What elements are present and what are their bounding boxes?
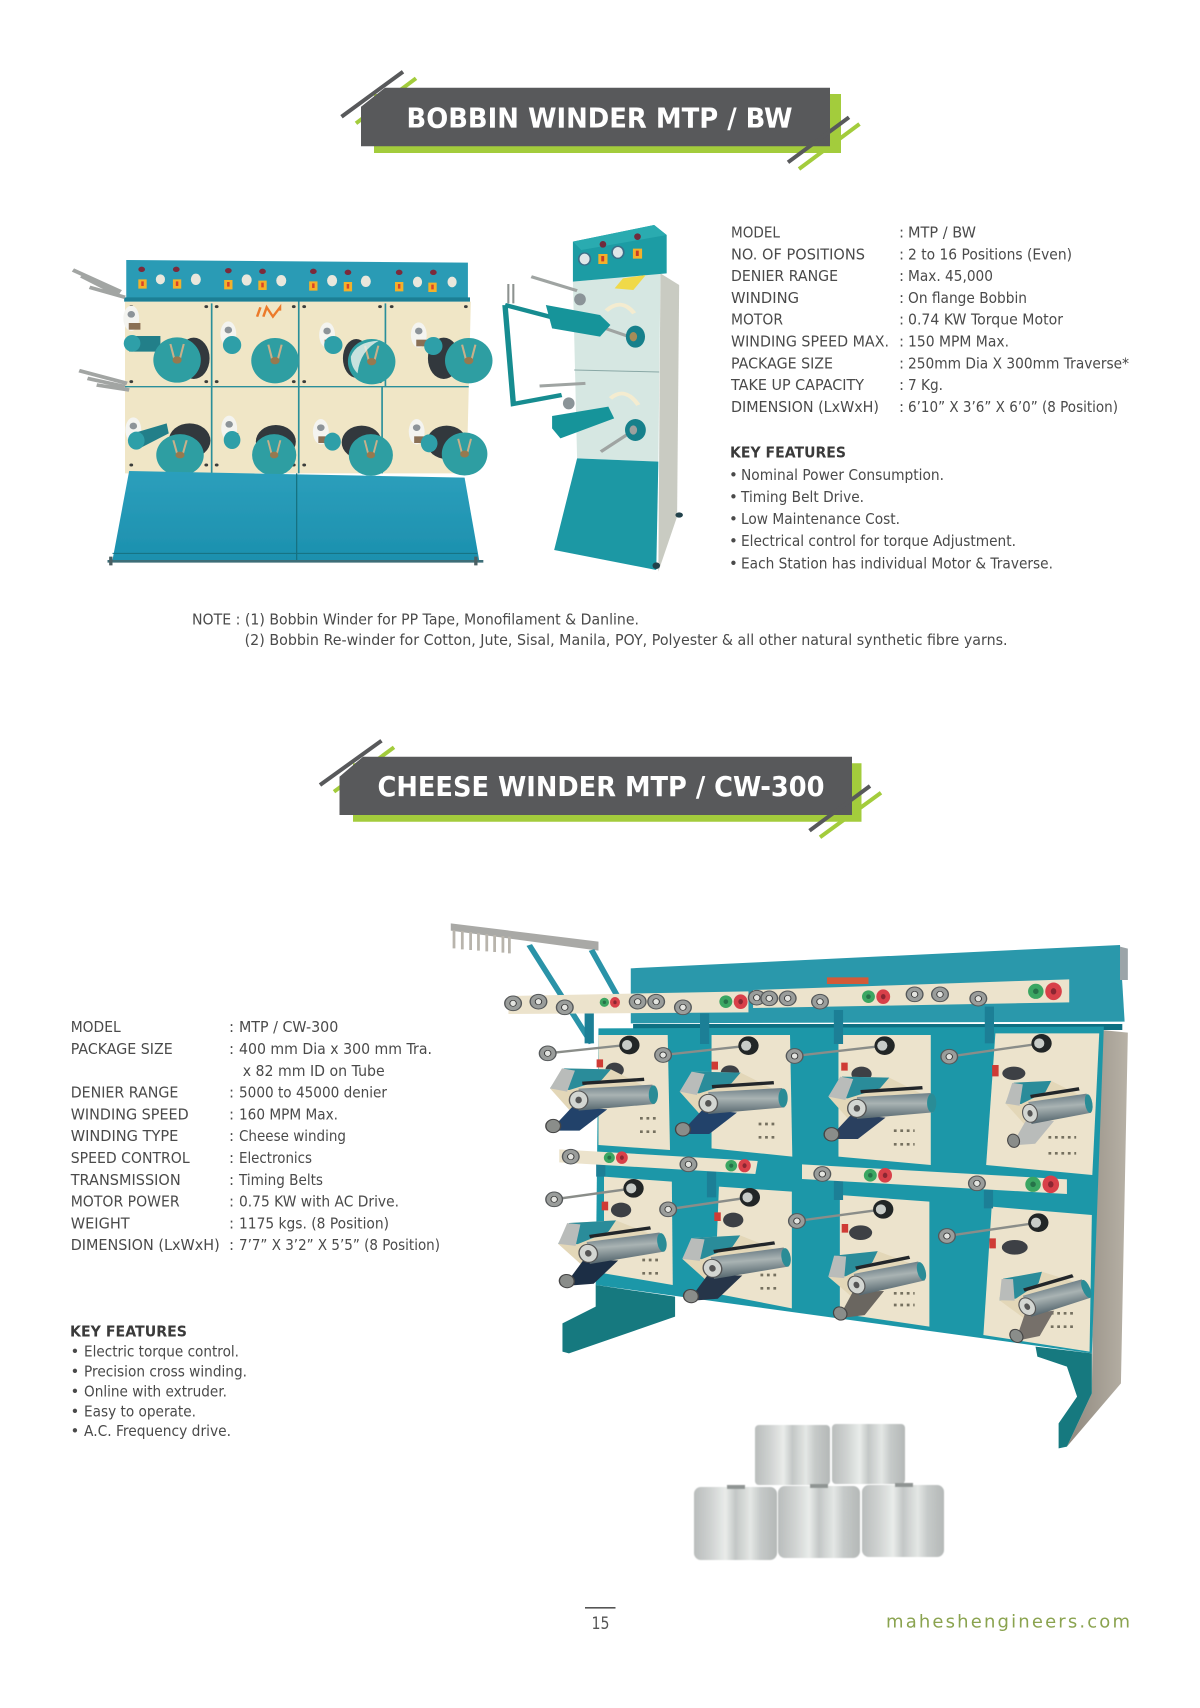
spec list: bobbin winder: DENIER RANGE — [731, 267, 838, 285]
key features: bobbin winder: Electrical control for torque Adjustment. — [741, 532, 1016, 550]
winding discs — [153, 337, 493, 476]
spec list: bobbin winder: 150 MPM Max. — [908, 332, 1009, 350]
heading text: bobbin winder: BOBBIN WINDER MTP / BW — [406, 101, 793, 134]
spec list: bobbin winder: : — [899, 332, 904, 350]
spec list: cheese winder: TRANSMISSION — [70, 1171, 181, 1189]
page number — [585, 1607, 616, 1633]
spec list: cheese winder: x 82 mm ID on Tube — [243, 1062, 385, 1080]
spec list: bobbin winder: MODEL — [731, 224, 781, 242]
spec list: cheese winder: Cheese winding — [239, 1127, 346, 1145]
key features: bobbin winder — [729, 444, 1053, 572]
spec list: cheese winder: : — [229, 1084, 234, 1102]
key features: bobbin winder: Each Station has individual Motor & Traverse. — [741, 554, 1053, 572]
yarn packages photo — [694, 1424, 944, 1560]
spec list: cheese winder: : — [229, 1040, 234, 1058]
note text — [192, 610, 1008, 649]
spec list: bobbin winder: : — [899, 311, 904, 329]
key features: cheese winder — [70, 1322, 247, 1440]
key features: cheese winder: • — [70, 1402, 79, 1420]
cream station plates — [598, 1033, 1099, 1352]
key features: cheese winder: • — [70, 1362, 79, 1380]
spec list: bobbin winder: NO. OF POSITIONS — [731, 245, 865, 263]
spec list: bobbin winder: TAKE UP CAPACITY — [730, 376, 865, 394]
red tags — [597, 1059, 999, 1248]
arm wheels — [539, 1046, 958, 1243]
key features: bobbin winder: Timing Belt Drive. — [740, 488, 864, 506]
spec list: cheese winder: SPEED CONTROL — [71, 1149, 190, 1167]
thread guides — [73, 270, 129, 390]
spec list: cheese winder: 1175 kgs. (8 Position) — [239, 1214, 389, 1232]
orange logo mark — [257, 307, 280, 317]
spec list: cheese winder: : — [229, 1149, 234, 1167]
spec list: bobbin winder: : — [899, 245, 904, 263]
spec list: bobbin winder: : — [899, 289, 904, 307]
spec list: cheese winder: : — [229, 1018, 234, 1036]
spec list: cheese winder: : — [229, 1105, 234, 1123]
key features: bobbin winder: KEY FEATURES — [730, 444, 846, 462]
heading banner: cheese winder — [320, 741, 881, 837]
spec list: cheese winder: : — [229, 1236, 234, 1254]
key features: cheese winder: • — [70, 1382, 79, 1400]
website footer: maheshengineers.com — [886, 1612, 1130, 1633]
spec list: bobbin winder: : — [899, 267, 904, 285]
main teal frame — [596, 1027, 1104, 1353]
spec list: cheese winder: 5000 to 45000 denier — [239, 1084, 388, 1102]
key features: cheese winder: Online with extruder. — [84, 1382, 227, 1400]
key features: cheese winder: Electric torque control. — [84, 1342, 239, 1360]
spec list: cheese winder: 0.75 KW with AC Drive. — [239, 1193, 399, 1211]
machine photo: cheese winder — [451, 923, 1128, 1448]
traverse cams — [123, 306, 428, 444]
spec list: bobbin winder: 2 to 16 Positions (Even) — [908, 245, 1072, 263]
grey side panel — [1067, 1030, 1128, 1447]
spec list: cheese winder: MODEL — [71, 1018, 121, 1036]
key features: bobbin winder: • — [729, 466, 738, 484]
key features: cheese winder: • — [70, 1342, 79, 1360]
spec list: cheese winder — [70, 1018, 440, 1254]
spec list: cheese winder: DENIER RANGE — [71, 1084, 178, 1102]
heading text: cheese winder: CHEESE WINDER MTP / CW-300 — [378, 770, 824, 803]
spec list: cheese winder: WEIGHT — [71, 1214, 130, 1232]
key features: cheese winder: Easy to operate. — [84, 1402, 196, 1420]
spec list: bobbin winder: On flange Bobbin — [908, 289, 1027, 307]
control panel strip — [124, 260, 470, 302]
spec list: cheese winder: 160 MPM Max. — [239, 1105, 338, 1123]
spec list: cheese winder: PACKAGE SIZE — [71, 1040, 173, 1058]
note text: NOTE : (1) Bobbin Winder for PP Tape, Monofilament & Danline. — [192, 610, 639, 628]
winding heads — [546, 1068, 1105, 1344]
spec list: bobbin winder: PACKAGE SIZE — [731, 354, 833, 372]
key features: bobbin winder: Nominal Power Consumption. — [741, 466, 944, 484]
spec list: cheese winder: : — [229, 1171, 234, 1189]
key features: bobbin winder: • — [729, 488, 738, 506]
spec list: cheese winder: Electronics — [239, 1149, 312, 1167]
key features: cheese winder: KEY FEATURES — [70, 1322, 187, 1340]
wheel arms — [548, 1043, 1042, 1236]
spec list: bobbin winder: 7 Kg. — [908, 376, 943, 394]
bar wheels — [505, 987, 987, 1191]
spec list: bobbin winder: : — [899, 398, 904, 416]
spec list: cheese winder: MOTOR POWER — [71, 1193, 180, 1211]
note text: (2) Bobbin Re-winder for Cotton, Jute, Sisal, Manila, POY, Polyester & all other natural synthetic fibre yarns. — [245, 631, 1008, 649]
right foot — [1036, 1347, 1092, 1448]
page number: 15 — [592, 1614, 610, 1633]
spec list: bobbin winder: WINDING SPEED MAX. — [731, 332, 889, 350]
spec list: bobbin winder: : — [899, 354, 904, 372]
spec list: bobbin winder: Max. 45,000 — [908, 267, 993, 285]
spec list: cheese winder: : — [229, 1127, 234, 1145]
spec list: bobbin winder: 250mm Dia X 300mm Traverse* — [908, 354, 1129, 372]
spool cores — [169, 338, 467, 459]
dark gears — [605, 1063, 1028, 1255]
bar support posts — [589, 1007, 989, 1208]
rear teal housing — [631, 945, 1128, 1030]
cream control bars — [508, 979, 1069, 1194]
spec list: cheese winder: DIMENSION (LxWxH) — [71, 1236, 220, 1254]
key features: bobbin winder: • — [729, 510, 738, 528]
spec list: bobbin winder: 6’10” X 3’6” X 6’0” (8 Position) — [908, 398, 1118, 416]
terminal dots — [640, 1118, 1076, 1327]
spec list: bobbin winder: WINDING — [731, 289, 799, 307]
push buttons — [600, 983, 1062, 1193]
spec list: cheese winder: MTP / CW-300 — [239, 1018, 338, 1036]
machine photo: bobbin winder side view — [505, 225, 683, 572]
spec list: cheese winder: : — [229, 1193, 234, 1211]
key features: cheese winder: Precision cross winding. — [84, 1362, 247, 1380]
spec list: cheese winder: WINDING TYPE — [71, 1127, 178, 1145]
spec list: cheese winder: WINDING SPEED — [71, 1105, 189, 1123]
spec list: cheese winder: 7’7” X 3’2” X 5’5” (8 Position) — [239, 1236, 440, 1254]
key features: bobbin winder: • — [729, 554, 738, 572]
spec list: bobbin winder: 0.74 KW Torque Motor — [908, 311, 1064, 329]
spec list: bobbin winder: MOTOR — [731, 311, 783, 329]
left foot — [562, 1285, 675, 1353]
heading banner: bobbin winder — [342, 72, 860, 169]
thread hanger rail — [451, 923, 626, 1043]
key features: bobbin winder: Low Maintenance Cost. — [741, 510, 900, 528]
spec list: cheese winder: 400 mm Dia x 300 mm Tra. — [239, 1040, 432, 1058]
spec list: bobbin winder: MTP / BW — [908, 224, 976, 242]
spec list: cheese winder: : — [229, 1214, 234, 1232]
arm hubs — [619, 1034, 1052, 1232]
key features: cheese winder: • — [70, 1422, 79, 1440]
base cover — [108, 471, 483, 565]
spec list: bobbin winder: : — [899, 376, 904, 394]
spec list: cheese winder: Timing Belts — [238, 1171, 323, 1189]
cream station panels — [125, 300, 471, 473]
key features: cheese winder: A.C. Frequency drive. — [84, 1422, 231, 1440]
teal motors — [124, 335, 443, 452]
key features: bobbin winder: • — [729, 532, 738, 550]
spec list: bobbin winder: : — [899, 224, 904, 242]
spec list: bobbin winder: DIMENSION (LxWxH) — [731, 398, 879, 416]
machine photo: bobbin winder front view — [73, 260, 493, 565]
spec list: bobbin winder — [730, 224, 1129, 416]
